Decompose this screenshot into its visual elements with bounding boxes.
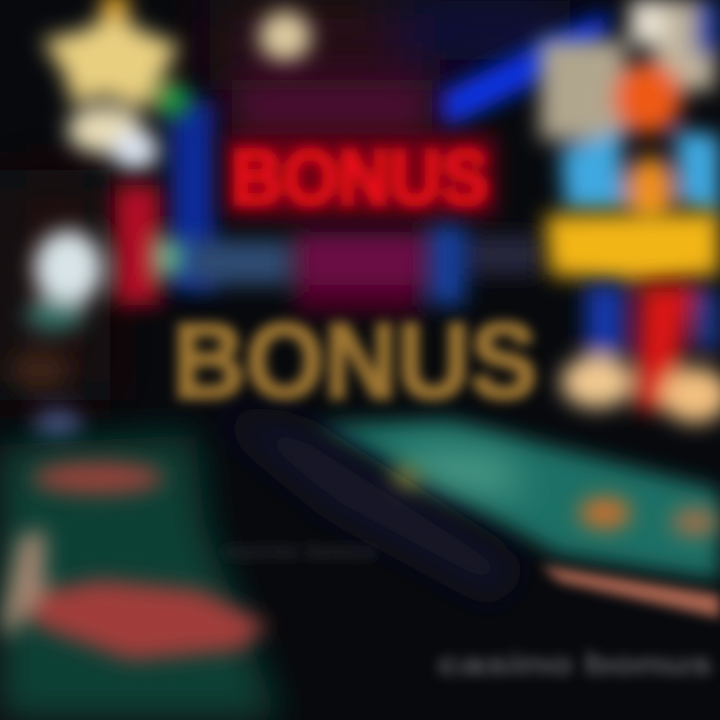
heading: gold bonus: BONUS: [172, 300, 538, 421]
panel: purple band: [190, 225, 540, 313]
round lamp: [259, 11, 311, 63]
dark table edge: [215, 415, 520, 600]
background glow: [0, 0, 570, 400]
caption: blurred text line lower centre: casino bonus: [225, 541, 375, 563]
yellow banner: [545, 212, 720, 282]
figure: colorful mascot right: [540, 0, 720, 423]
left red column and lights: [10, 185, 184, 441]
panel: red bonus sign: [225, 80, 495, 221]
chips: upper red pile: [32, 462, 164, 494]
caption: blurred text line bottom right: casino bonus: [438, 648, 712, 681]
table: left green felt: [0, 435, 280, 720]
chips on table: [391, 468, 719, 536]
chips: lower red pile: [2, 530, 268, 660]
star light top left: [42, 0, 190, 170]
blue light streak: [170, 10, 610, 290]
heading: red bonus: BONUS: [231, 133, 489, 221]
table: right teal felt: [315, 420, 720, 618]
